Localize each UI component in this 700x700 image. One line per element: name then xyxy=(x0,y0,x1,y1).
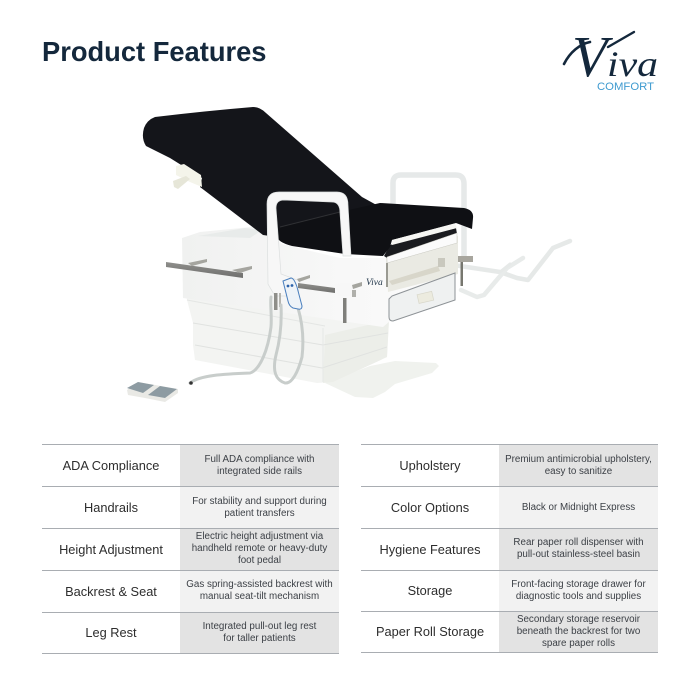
row: ADA Compliance: ADA Compliance xyxy=(63,458,159,473)
row: Handrails: patient transfers xyxy=(224,508,295,518)
table: left specifications xyxy=(42,444,339,654)
product photo: examination table xyxy=(127,107,572,402)
row: Paper Roll Storage: Secondary storage reservoir xyxy=(517,614,640,625)
row: Paper Roll Storage: beneath the backrest for two xyxy=(517,626,640,637)
seat cushion xyxy=(277,203,473,256)
row: Storage: Front-facing storage drawer for xyxy=(511,578,646,590)
backrest cushion xyxy=(143,107,382,240)
row: Color Options: Black or Midnight Express xyxy=(522,502,635,512)
row: Height Adjustment: handheld remote or heavy-duty xyxy=(192,543,327,554)
base cabinet xyxy=(182,226,455,327)
row: Color Options xyxy=(361,486,658,528)
row: Leg Rest: for taller patients xyxy=(223,633,296,644)
row: Storage: Storage xyxy=(408,583,452,598)
row: Hygiene Features: Rear paper roll dispenser with xyxy=(513,537,644,548)
row: ADA Compliance: integrated side rails xyxy=(217,466,302,476)
storage drawer xyxy=(389,273,455,321)
logo: Viva Comfort: COMFORT xyxy=(597,81,654,93)
row: Backrest & Seat xyxy=(42,570,339,612)
paper roll holder knob xyxy=(173,164,202,189)
row: Height Adjustment xyxy=(42,528,339,570)
row: Hygiene Features: pull-out stainless-steel basin xyxy=(517,549,640,560)
title: Product Features xyxy=(42,36,266,67)
row: Leg Rest: Integrated pull-out leg rest xyxy=(203,621,316,632)
row: Backrest & Seat: Backrest & Seat xyxy=(65,584,157,598)
logo: Viva Comfort: iva xyxy=(607,44,658,84)
row: Upholstery: Upholstery xyxy=(399,458,461,473)
handheld remote xyxy=(283,278,302,309)
row: Paper Roll Storage xyxy=(361,610,658,653)
side handrail xyxy=(267,192,358,296)
row: Upholstery: easy to sanitize xyxy=(545,466,612,476)
row: Leg Rest: Leg Rest xyxy=(85,625,137,640)
row: Backrest & Seat: manual seat-tilt mechanism xyxy=(200,591,319,602)
row: Backrest & Seat: Gas spring-assisted backrest with xyxy=(186,579,333,590)
seat mechanism and paper layers xyxy=(384,228,458,292)
row: ADA Compliance xyxy=(42,444,339,486)
row: Upholstery: Premium antimicrobial upholstery, xyxy=(505,454,652,464)
row: Upholstery xyxy=(361,444,658,486)
brand mark on cabinet: Viva xyxy=(366,278,383,288)
row: Handrails: For stability and support during xyxy=(192,496,327,506)
back leg rail xyxy=(393,175,464,258)
row: Color Options: Color Options xyxy=(391,500,469,515)
row: Storage xyxy=(361,570,658,610)
row: Hygiene Features: Hygiene Features xyxy=(379,542,480,557)
floor plate xyxy=(325,361,439,398)
row: Height Adjustment: Electric height adjustment via xyxy=(196,531,323,542)
logo: Viva Comfort xyxy=(562,24,658,93)
front grey grab bars xyxy=(166,259,362,323)
coiled cables xyxy=(189,297,303,385)
row: Handrails: Handrails xyxy=(84,500,138,515)
row: ADA Compliance: Full ADA compliance with xyxy=(204,454,314,464)
row: Height Adjustment: foot pedal xyxy=(238,555,281,566)
row: Height Adjustment: Height Adjustment xyxy=(59,542,163,557)
row: Paper Roll Storage: spare paper rolls xyxy=(542,638,615,649)
row: Leg Rest xyxy=(42,612,339,654)
row: Paper Roll Storage: Paper Roll Storage xyxy=(376,624,484,639)
row: Storage: diagnostic tools and supplies xyxy=(516,590,641,602)
table: right specifications xyxy=(361,444,658,653)
logo: Viva Comfort: V xyxy=(572,24,614,89)
row: Hygiene Features xyxy=(361,528,658,570)
pull-out leg rest xyxy=(440,241,570,297)
pedestal tiers xyxy=(186,296,389,383)
foot pedal xyxy=(127,382,178,402)
row: Handrails xyxy=(42,486,339,528)
